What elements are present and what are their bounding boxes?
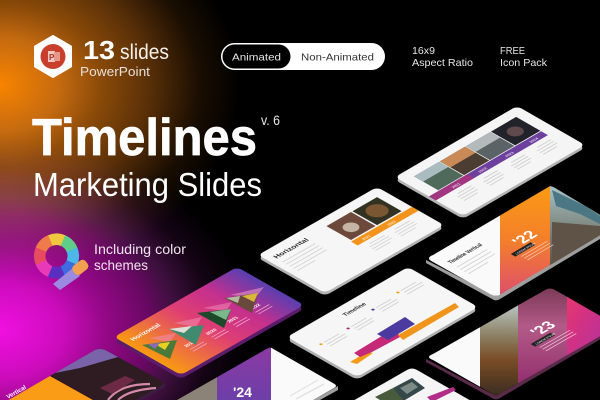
slide card: photo timeline top right: 2022 [477,166,489,173]
heading: slide count [83,35,169,65]
slide card: timeline vertical: Timeline Vertical [446,242,485,265]
slide card: horizontal white [258,187,444,296]
text: free icon pack: Icon Pack [500,57,548,69]
slide card: 2023 forest: '23 [527,319,560,338]
text: free icon pack: FREE [500,45,525,57]
text: free icon pack [500,45,548,69]
toggle: animated / non-animated: Animated [232,52,281,64]
slide card: 2024 purple: '24 [233,384,252,400]
text: including color schemes [94,241,186,273]
label: PowerPoint: PowerPoint [80,65,151,79]
text: aspect ratio: 16x9 [412,45,435,57]
slide card: horizontal gradient with triangles: 2019 [183,340,198,348]
slide card: horizontal gradient with triangles: 2020 [204,328,219,336]
slide card: 2023 forest: LOREM IPSUM [534,332,557,345]
slide card: horizontal gradient with triangles: 2021 [226,315,241,324]
text: including color schemes: Including color [94,241,186,257]
slide card: gantt timeline: Timeline [341,302,369,318]
slide card: timeline vertical: LOREM IPSUM [514,242,537,255]
text: including color schemes: schemes [94,257,148,273]
slide card: photo timeline top right [395,106,585,219]
icon: color wheel with dropper [35,234,90,290]
toggle: animated / non-animated: Non-Animated [301,52,374,64]
slide card: 2024 purple [177,347,338,400]
slide card: horizontal white: Horizontal [272,238,311,260]
icon: PowerPoint hexagon: P [49,53,55,62]
slide card: horizontal white: 2021 [361,234,373,241]
heading: slide count: 13 [83,35,115,65]
triangle photos [142,287,264,359]
slide card: 2023 forest [426,288,600,399]
slide card: horizontal white: 2022 [386,220,397,226]
slide card: timeline vertical [426,186,600,300]
slide card: horizontal gradient with triangles: Horizontal [129,323,163,342]
slide card: photo timeline top right: 2023 [503,151,516,158]
slide card: bottom photo timeline [354,368,470,400]
gantt bars [350,303,459,364]
slide card: gantt timeline [287,267,478,380]
heading: slide count: slides [120,41,169,64]
icon: PowerPoint hexagon [35,36,71,77]
slide card: horizontal gradient with triangles: 2022 [248,303,263,311]
text: aspect ratio: Aspect Ratio [412,57,473,69]
slide card: photo timeline top right: 2021 [450,182,463,189]
version label: v. 6 [261,113,280,128]
slide card: photo timeline top right: 2024 [528,136,540,144]
title: Timelines [32,109,257,167]
subtitle: Marketing Slides [33,166,262,203]
slide mockups [6,106,600,400]
slide card: timeline vertical: '22 [509,228,542,248]
slide card: vertical with night photo [6,349,165,400]
slide card: horizontal gradient with triangles [114,267,304,379]
text: aspect ratio [412,45,473,69]
toggle: animated / non-animated [221,43,385,70]
